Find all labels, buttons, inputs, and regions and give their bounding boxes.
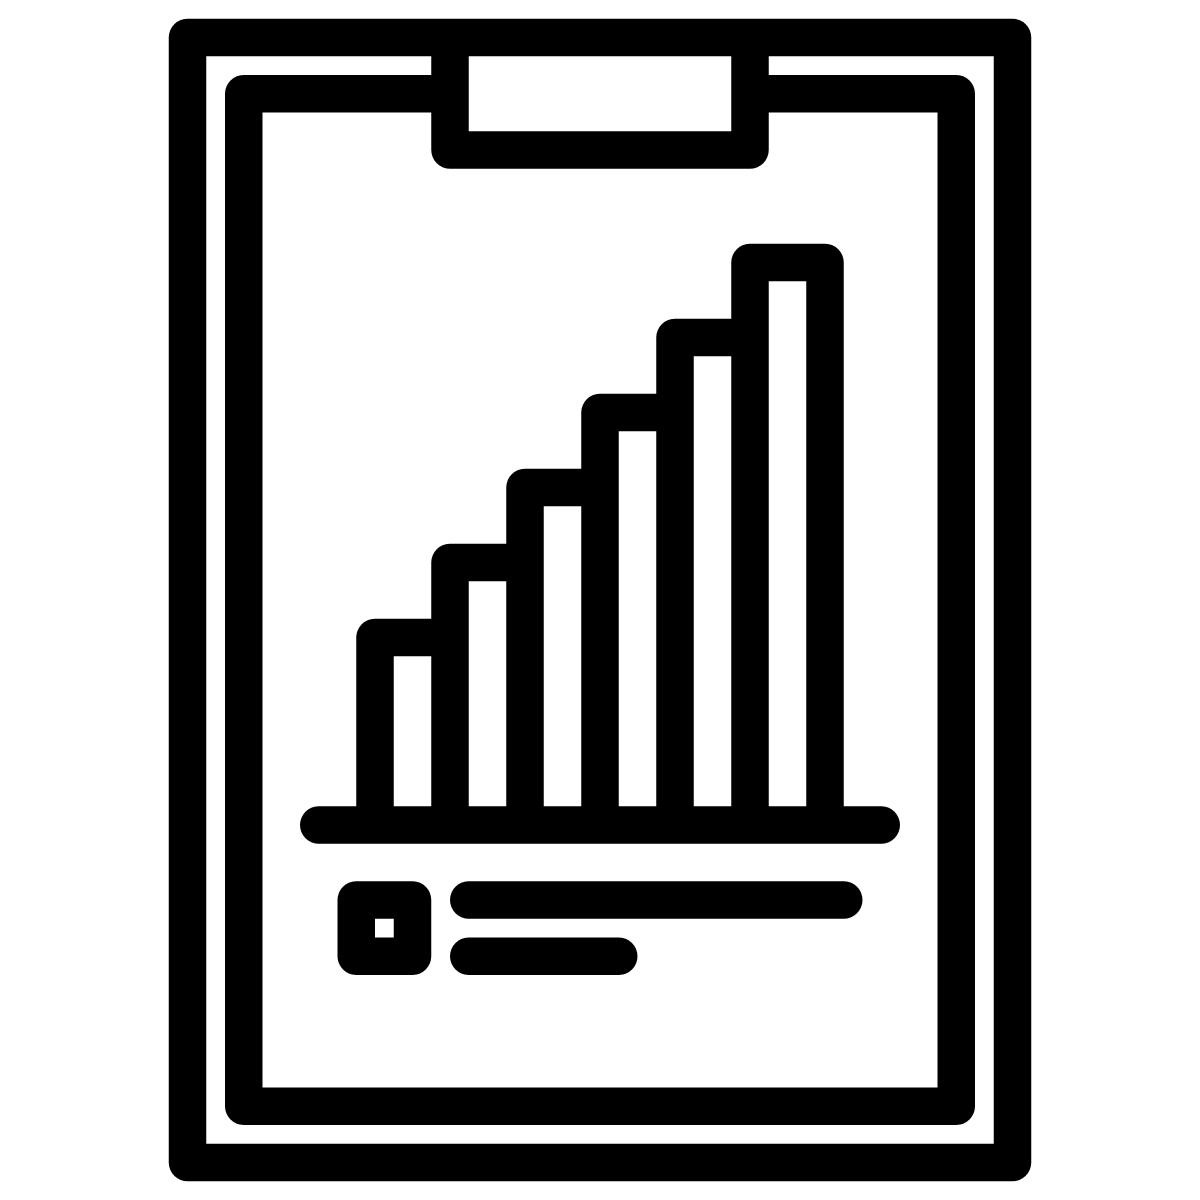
bar 1 <box>375 638 450 825</box>
bar 3 <box>525 488 600 825</box>
legend text line 1 <box>469 881 844 919</box>
clip <box>450 38 750 150</box>
bar 6 <box>750 262 825 825</box>
bar 4 <box>600 412 675 825</box>
legend text line 2 <box>469 938 619 975</box>
chart baseline <box>319 806 881 844</box>
bar 2 <box>450 562 525 825</box>
legend <box>356 900 844 956</box>
clipboard outer board <box>188 38 1012 1162</box>
bar 5 <box>675 338 750 825</box>
paper sheet <box>244 94 956 1106</box>
legend swatch <box>356 900 412 956</box>
bar chart <box>319 262 881 825</box>
